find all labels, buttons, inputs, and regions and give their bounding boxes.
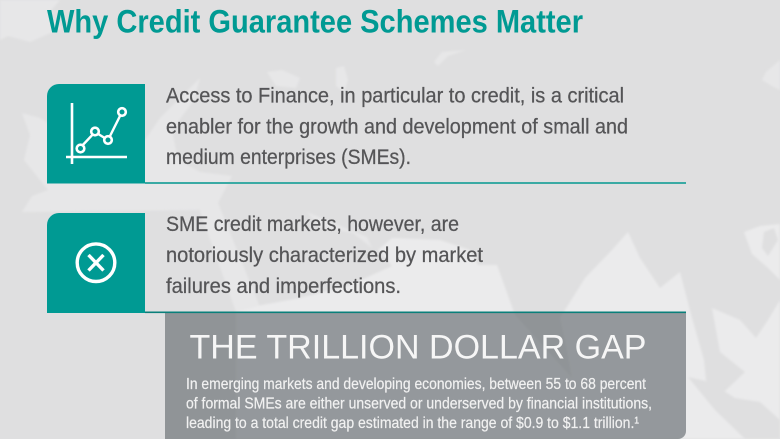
panel: the trillion dollar gap: [145, 312, 686, 439]
icon: line chart: [47, 84, 145, 184]
divider rule: [145, 182, 686, 184]
text block: gap description: [186, 376, 652, 432]
text block: gap description: leading to a total credit gap estimated in the range of $0.9 to $1.1 trillion.¹: [186, 415, 639, 432]
text block: market failures: notoriously characterized by market: [166, 244, 483, 267]
text block: market failures: SME credit markets, however, are: [166, 213, 459, 236]
title: Why Credit Guarantee Schemes Matter: [47, 4, 583, 40]
icon: x in circle: [47, 213, 145, 313]
heading: the trillion dollar gap: THE TRILLION DOLLAR GAP: [190, 328, 646, 366]
text block: gap description: of formal SMEs are either unserved or underserved by financial institutions,: [186, 396, 652, 412]
panel: market failures: [47, 213, 483, 313]
text block: access to finance: Access to Finance, in particular to credit, is a critical: [166, 84, 624, 108]
panel: access to finance: [47, 84, 686, 184]
text block: access to finance: [166, 84, 628, 169]
text block: access to finance: enabler for the growth and development of small and: [166, 116, 628, 138]
text block: gap description: In emerging markets and developing economies, between 55 to 68 percent: [186, 376, 646, 393]
text block: market failures: failures and imperfections.: [166, 275, 401, 298]
text block: market failures: [166, 213, 483, 298]
text block: access to finance: medium enterprises (SMEs).: [166, 146, 411, 169]
